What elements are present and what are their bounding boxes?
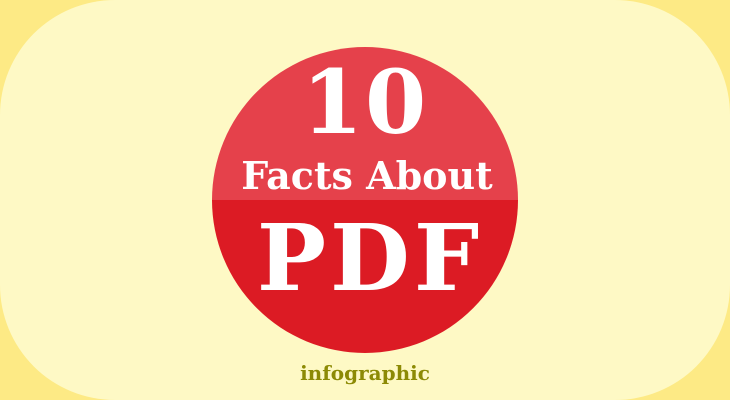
- red circle badge: [212, 47, 518, 353]
- footer label: infographic: [300, 361, 430, 385]
- subtitle: Facts About: [241, 153, 493, 198]
- main word: PDF: [257, 204, 483, 312]
- title number: 10: [302, 50, 428, 154]
